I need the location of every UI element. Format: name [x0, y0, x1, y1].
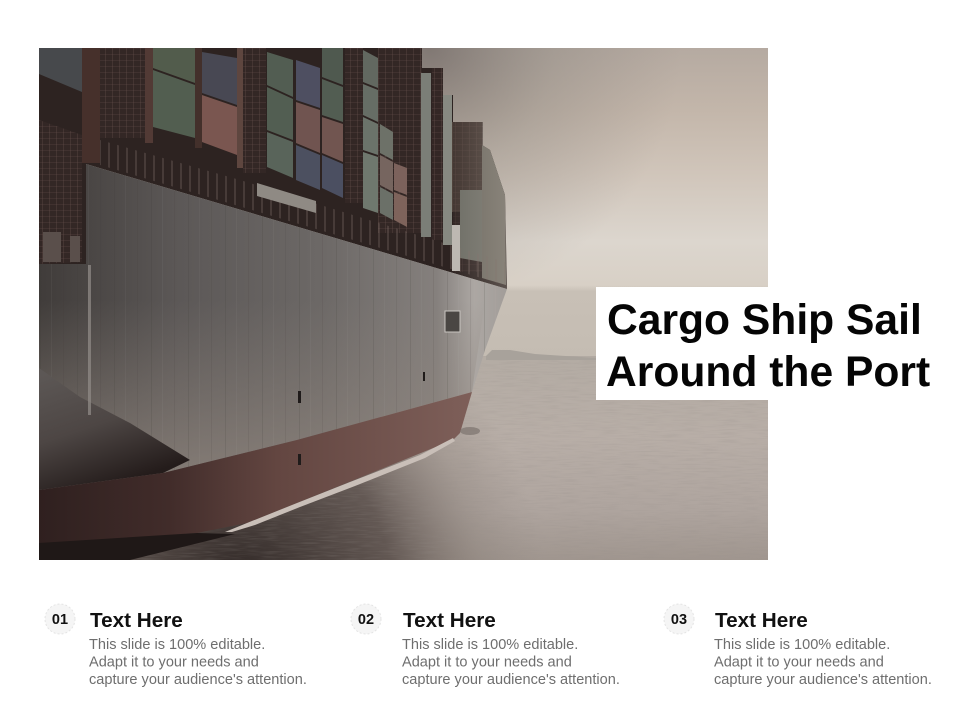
heading 01: Text Here — [90, 609, 183, 632]
waterline shadow — [39, 533, 235, 560]
body 02: This slide is 100% editable. — [402, 637, 578, 653]
title: Around the Port — [606, 348, 930, 396]
anchor chain — [88, 265, 91, 415]
white mast — [452, 225, 460, 271]
body 01: capture your audience's attention. — [89, 672, 307, 688]
item 03 — [664, 604, 932, 688]
hull marks — [298, 372, 425, 465]
bulbous bow shadow — [39, 368, 190, 490]
number badge 01: 01 — [52, 612, 68, 628]
number badge 01 — [45, 604, 75, 634]
body 03: capture your audience's attention. — [714, 672, 932, 688]
number badge 02: 02 — [358, 612, 374, 628]
upper deck walkway — [257, 183, 316, 213]
heading 02: Text Here — [403, 609, 496, 632]
sky — [39, 48, 768, 360]
title box — [596, 287, 768, 400]
hull — [39, 164, 507, 490]
distant shore — [486, 350, 596, 360]
superstructure stairs — [39, 120, 82, 264]
body 03: Adapt it to your needs and — [714, 654, 884, 670]
bow wave — [460, 427, 480, 435]
number badge 03: 03 — [671, 612, 687, 628]
title: Cargo Ship Sail — [607, 296, 922, 344]
body 03: This slide is 100% editable. — [714, 637, 890, 653]
wake foam — [225, 438, 455, 532]
item 02 — [351, 604, 620, 688]
body 02: Adapt it to your needs and — [402, 654, 572, 670]
photo: cargo ship at port — [39, 48, 768, 560]
body 02: capture your audience's attention. — [402, 672, 620, 688]
red boot-top — [39, 392, 472, 545]
container stacks — [39, 48, 507, 289]
number badge 03 — [664, 604, 694, 634]
number badge 02 — [351, 604, 381, 634]
body 01: This slide is 100% editable. — [89, 637, 265, 653]
water — [39, 356, 768, 560]
heading 03: Text Here — [715, 609, 808, 632]
item 01 — [45, 604, 307, 688]
body 01: Adapt it to your needs and — [89, 654, 259, 670]
hull window — [445, 311, 460, 332]
